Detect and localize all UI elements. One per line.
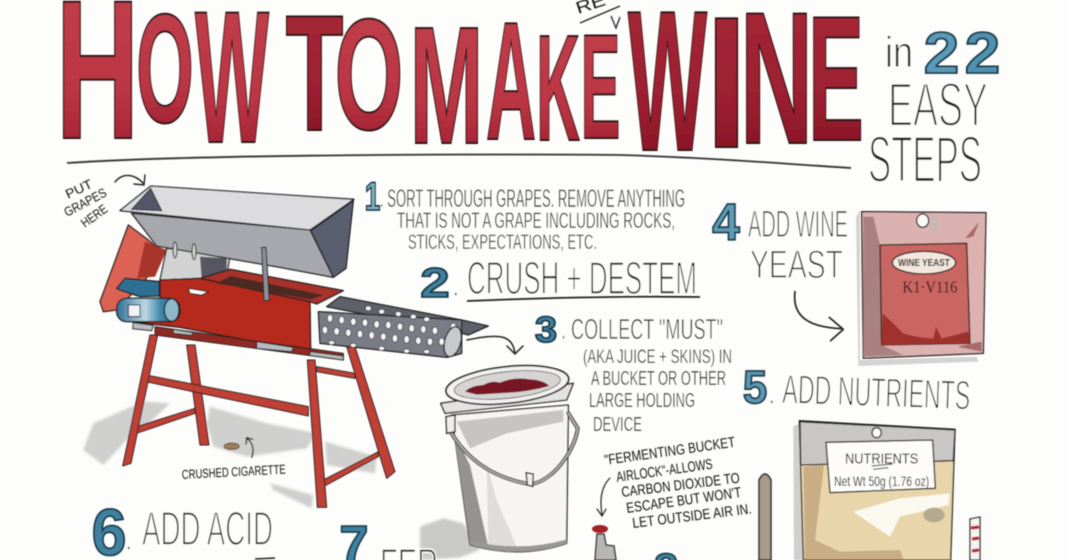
step 2 heading: crush and destem [420,262,701,303]
illustration: yeast packet and arrow [795,210,986,366]
insertion note: RE [573,0,620,28]
step 6 heading: add acid: . [126,532,132,554]
ground shadow [83,402,377,508]
illustration: yeast packet and arrow: K1·V116 [902,278,957,297]
crushed cigarette [224,443,239,450]
step 3 text [535,311,732,436]
body [132,278,311,349]
step 2 heading: crush and destem: 2 [420,260,450,307]
step 1 text: STICKS, EXPECTATIONS, ETC. [408,231,597,254]
step 4 text [711,202,848,278]
bucket rim [441,383,573,413]
label: crushed cigarette: CRUSHED CIGARETTE [181,462,286,482]
step 2 heading: crush and destem: CRUSH + DESTEM [467,252,697,304]
yeast label [892,251,956,274]
trough frame [200,269,343,304]
packet shadow [856,210,978,366]
step 5 text: . [769,386,775,408]
subtitle: in 22 easy steps [870,30,1000,182]
note: fermenting bucket airlock: LET OUTSIDE AIR IN. [632,501,753,532]
motor [117,278,343,360]
note: fermenting bucket airlock: "FERMENTING BUCKET [603,435,736,469]
title: How to make wine: K [536,5,580,173]
yeast packet [862,212,986,358]
cigarette arrow [246,438,253,457]
note: fermenting bucket airlock [597,435,753,532]
step 6 heading: add acid: ADD ACID [142,503,273,556]
subtitle: in 22 easy steps: 2 [924,21,959,85]
step 3 text: 3 [535,311,557,351]
illustration: nutrients packet: Net Wt 50g (1.76 oz) [834,473,929,489]
arrow: chute to bucket [467,336,523,354]
annotation: put grapes here: GRAPES [61,185,109,220]
title rule [67,155,851,168]
bucket handle [452,413,578,484]
step 4 text: YEAST [750,243,843,287]
step 4 text: 4 [712,193,740,251]
step 2 heading: crush and destem: . [453,278,459,300]
illustration: crusher destemmer machine [83,186,488,508]
inner sachet [880,243,970,345]
step 3 text: (AKA JUICE + SKINS) IN [583,347,732,368]
step 1 text: 1 [365,175,380,219]
packet body [799,421,955,560]
perforated chute [318,297,488,359]
illustration: nutrients packet: NUTRIENTS [845,451,919,467]
step 5 text [742,369,970,410]
note: fermenting bucket airlock: AIRLOCK"-ALLOWS [615,457,714,486]
bucket shadow [420,518,480,560]
step 1 text [365,175,685,254]
annotation: put grapes here [61,175,145,230]
icon: thermometer [970,517,980,560]
step 3 text: DEVICE [593,414,642,436]
packet label [826,440,935,493]
hopper [120,186,354,301]
step 3 text: . COLLECT "MUST" [561,314,723,346]
curved arrow [795,292,843,341]
back plate [100,225,163,312]
note: fermenting bucket airlock: CARBON DIOXIDE TO [621,471,741,501]
note: fermenting bucket airlock: ESCAPE BUT WON'T [625,485,743,517]
step 4 text: ADD WINE [748,204,848,246]
icon: stirring stick [759,474,771,560]
step 1 text: THAT IS NOT A GRAPE INCLUDING ROCKS, [397,208,675,233]
illustration: yeast packet and arrow: WINE YEAST [898,258,950,269]
title: How to make wine [62,0,862,152]
bucket body [452,405,568,552]
stand legs [123,327,395,507]
title: How to make wine: E [581,4,620,171]
subtitle: in 22 easy steps: 2 [965,21,1000,85]
step 7 heading: ferment [340,516,438,560]
subtitle: in 22 easy steps: EASY [888,71,988,140]
icon: airlock [592,525,616,560]
must: crushed grapes [465,379,549,395]
step 3 text: LARGE HOLDING [589,390,695,412]
subtitle: in 22 easy steps: in [885,28,913,77]
step 5 text: 5 [743,361,767,413]
step 3 text: A BUCKET OR OTHER [591,368,726,390]
annotation: put grapes here: PUT [63,176,95,202]
packet shadow [793,423,803,560]
illustration: bucket of must [420,360,578,560]
illustration: nutrients packet [793,421,955,560]
hopper support [160,248,230,280]
step 6 heading: add acid [92,496,275,560]
step 1 text: . SORT THROUGH GRAPES. REMOVE ANYTHING [380,185,685,213]
annotation: put grapes here: HERE [78,201,110,230]
